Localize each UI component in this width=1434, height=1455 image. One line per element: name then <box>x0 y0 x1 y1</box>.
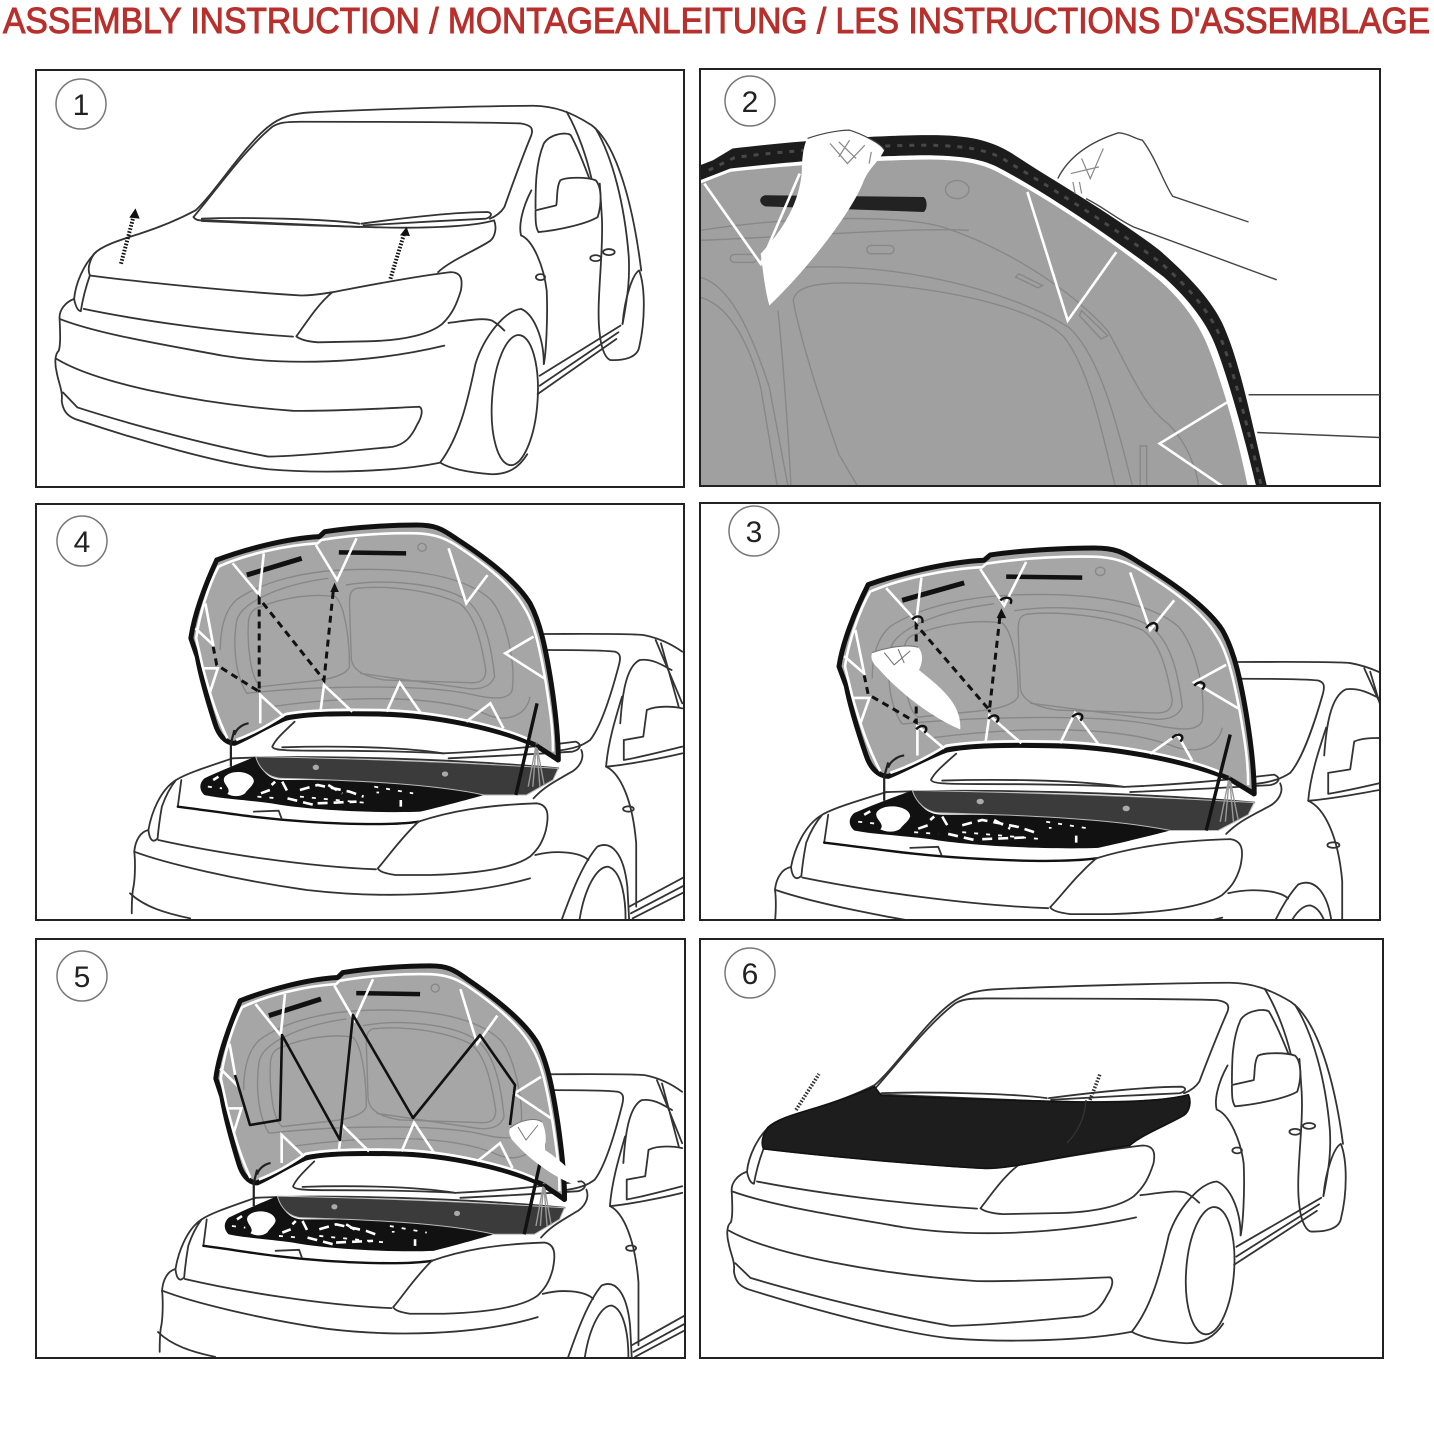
number badge 1 <box>56 79 106 129</box>
number badge 3 <box>729 506 779 556</box>
panel: step 3 <box>699 502 1381 921</box>
icon: left hand pulling liner <box>761 130 884 306</box>
car with open hood and dashed guide lines <box>130 525 685 919</box>
panel: step 5 <box>36 939 685 1358</box>
icon: right hand pulling liner <box>1058 133 1380 438</box>
panel: step 2 <box>700 69 1380 491</box>
car with open hood <box>158 966 685 1358</box>
icon: hand pulling cable <box>509 1120 580 1186</box>
number badge 3: 3 <box>746 516 762 549</box>
number badge 4 <box>57 516 107 566</box>
panel: step 4 <box>36 504 685 920</box>
car with closed hood <box>55 106 644 474</box>
number badge 1: 1 <box>73 89 89 122</box>
hood close-up with liner <box>700 135 1268 491</box>
icon: hand stretching liner <box>871 646 960 729</box>
black hood cover <box>762 1087 1190 1168</box>
number badge 6 <box>725 948 775 998</box>
arrow: left fastening strap <box>796 1074 819 1110</box>
number badge 4: 4 <box>74 526 90 559</box>
number badge 2 <box>725 76 775 126</box>
panel: step 6 <box>700 939 1383 1358</box>
arrow: right fastening strap <box>1067 1074 1100 1143</box>
number badge 6: 6 <box>742 958 758 991</box>
arrow: right hood dashed arrow <box>390 227 410 279</box>
number badge 5 <box>57 951 107 1001</box>
solid zigzag cable <box>235 1015 515 1140</box>
car with fitted hood bra <box>727 983 1346 1343</box>
number badge 5: 5 <box>74 961 90 994</box>
car with open hood, hooks and dashed guide lines <box>774 546 1379 919</box>
number badge 2: 2 <box>742 86 758 119</box>
panel: step 1 <box>36 70 684 487</box>
arrow: left hood dashed arrow <box>121 208 140 264</box>
